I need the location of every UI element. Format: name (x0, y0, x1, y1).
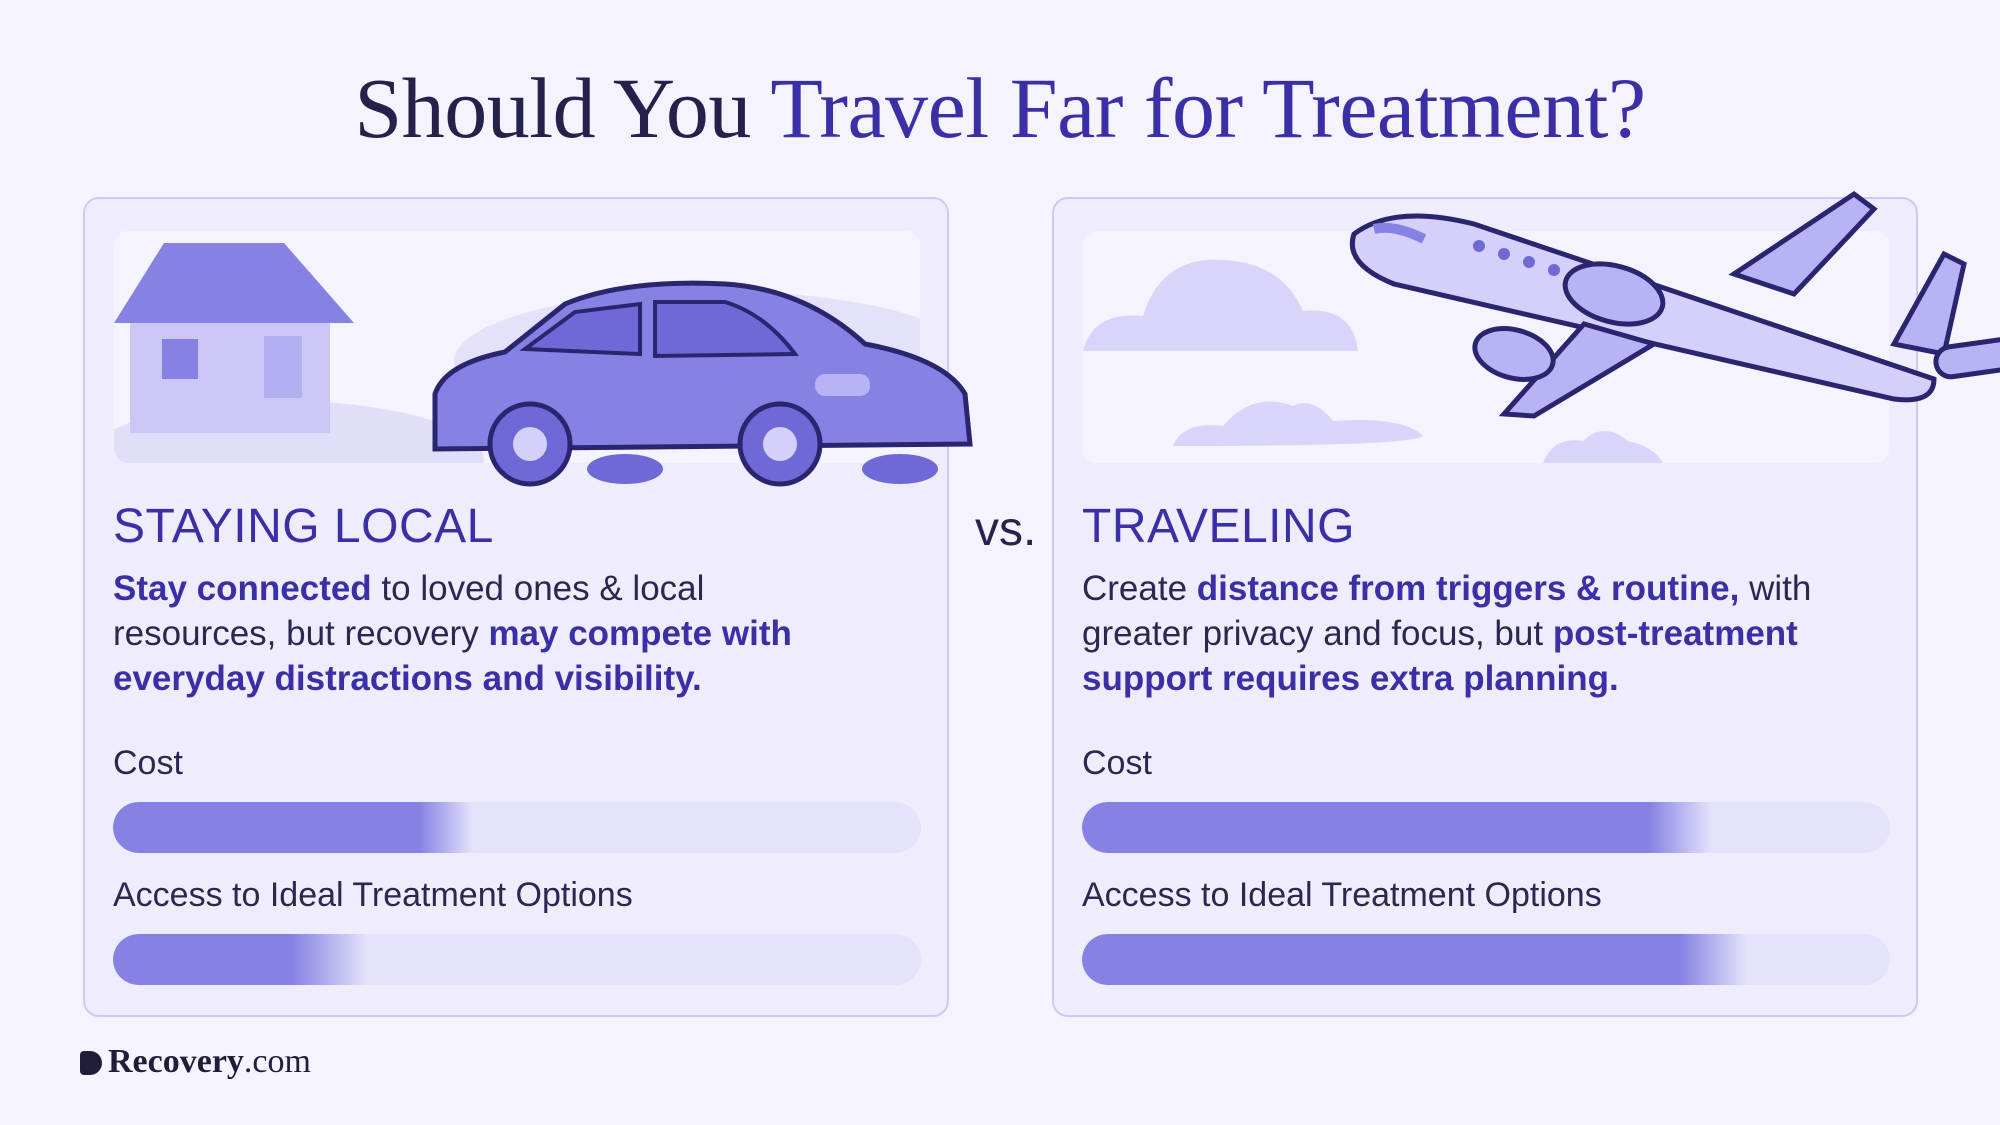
label: cost: Cost (113, 744, 183, 782)
panel: traveling (1052, 197, 1918, 1017)
icon: airplane (1350, 191, 2000, 418)
text block (113, 569, 792, 698)
icon: car (432, 280, 973, 486)
logo: Recovery.com (108, 1043, 311, 1080)
heading: TRAVELING (1082, 500, 1355, 553)
label: cost: Cost (1082, 744, 1152, 782)
text block (1082, 569, 1811, 698)
illustration: clouds (1083, 231, 1889, 463)
panel: staying local (83, 197, 949, 1017)
text block: greater privacy and focus, but post-treatment (1082, 614, 1798, 653)
text block: Stay connected to loved ones & local (113, 569, 704, 608)
bar chart: access (113, 934, 921, 985)
vs label: vs. (975, 503, 1036, 556)
label: access: Access to Ideal Treatment Options (113, 876, 633, 914)
heading: STAYING LOCAL (113, 500, 494, 553)
illustration: house and car (114, 231, 920, 463)
text block: Create distance from triggers & routine, with (1082, 569, 1811, 608)
text block: resources, but recovery may compete with (113, 614, 792, 653)
bar chart: cost (113, 802, 921, 853)
text block: everyday distractions and visibility. (113, 659, 702, 698)
bar chart: access (1082, 934, 1890, 985)
label: access: Access to Ideal Treatment Options (1082, 876, 1602, 914)
title: Should You Travel Far for Treatment? (354, 60, 1646, 156)
text block: support requires extra planning. (1082, 659, 1619, 698)
bar chart: cost (1082, 802, 1890, 853)
